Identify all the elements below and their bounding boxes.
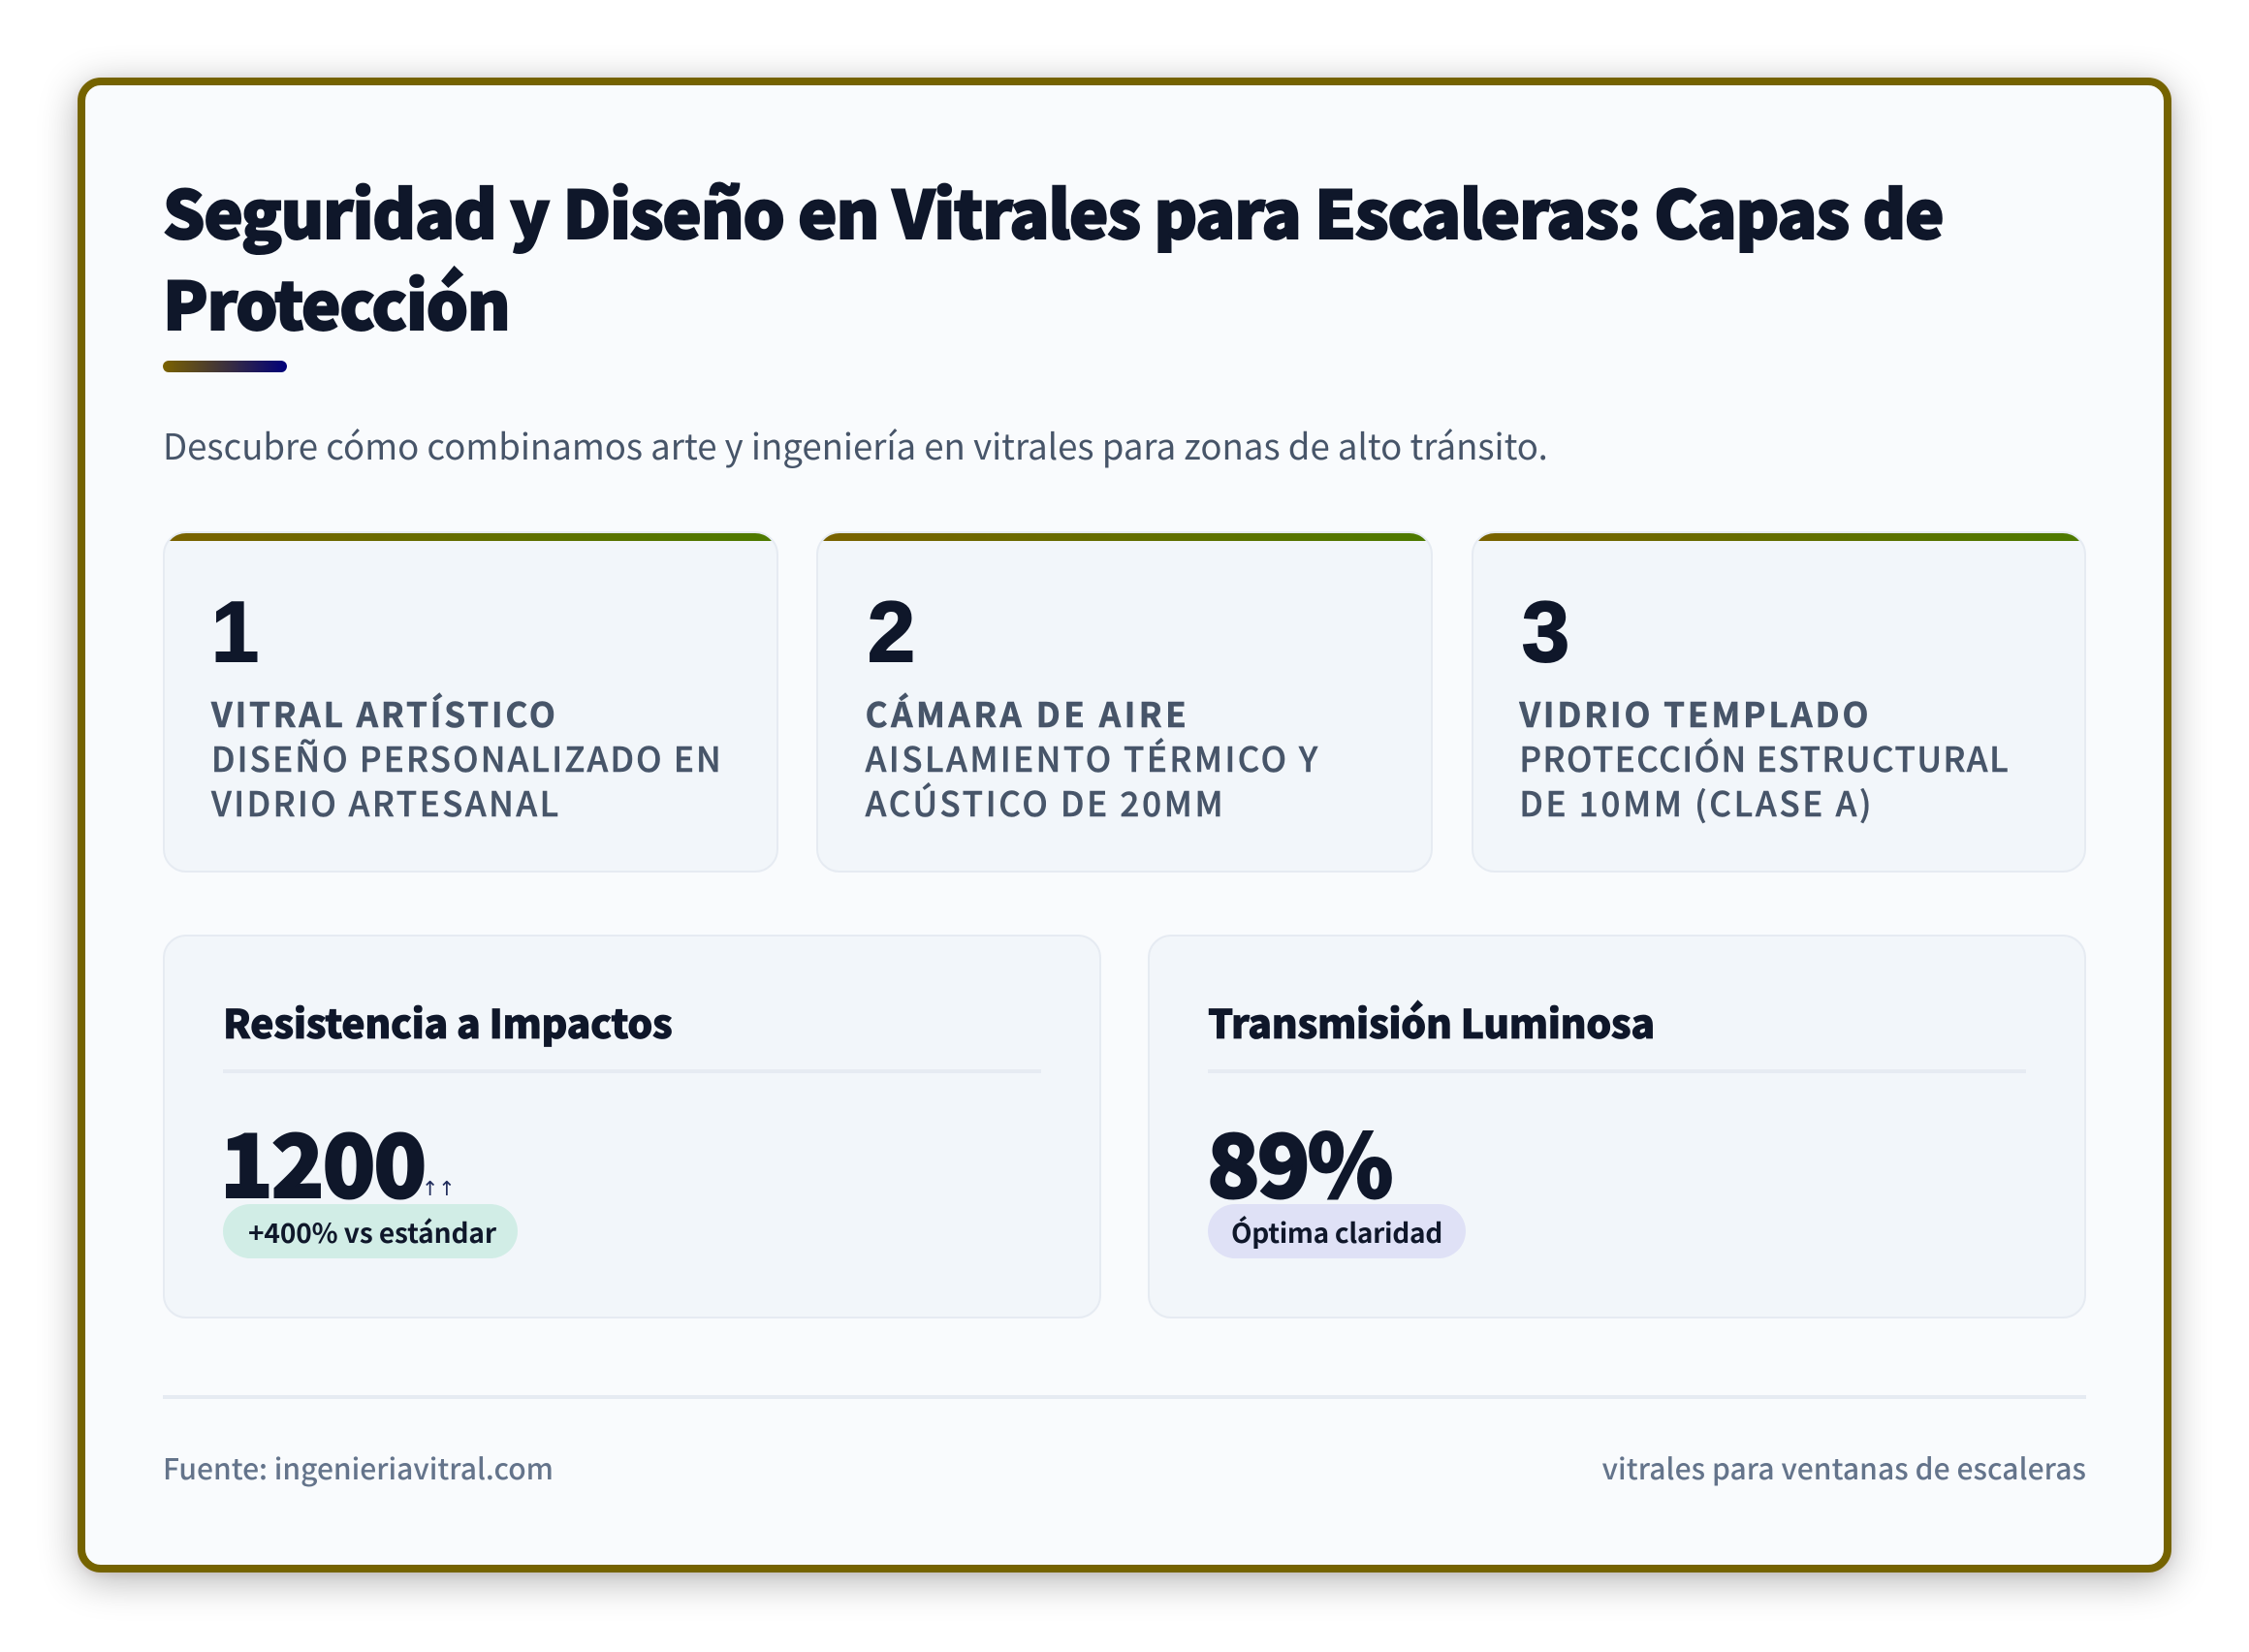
badge +400% — [223, 1204, 518, 1258]
title accent underline — [163, 361, 287, 372]
title — [163, 162, 1944, 349]
panel: impact resistance — [163, 935, 1101, 1318]
panel: layer 3 — [1472, 531, 2086, 873]
badge text +400%: +400% vs estándar — [248, 1213, 496, 1252]
label layer 1: VITRAL ARTÍSTICO — [211, 688, 558, 738]
footer source: Fuente: ingenieriavitral.com — [163, 1446, 554, 1488]
number 1: 1 — [211, 584, 259, 680]
title: Protección — [163, 253, 510, 349]
panel: light transmission — [1148, 935, 2086, 1318]
heading impact resistance: Resistencia a Impactos — [223, 992, 672, 1050]
label layer 3: PROTECCIÓN ESTRUCTURAL — [1519, 733, 2010, 782]
label layer 3 — [1518, 688, 2010, 827]
title: Seguridad y Diseño en Vitrales para Escaleras: Capas de — [163, 162, 1944, 258]
label layer 3: VIDRIO TEMPLADO — [1519, 688, 1871, 738]
footer keyword: vitrales para ventanas de escaleras — [1602, 1446, 2086, 1488]
badge optimal — [1208, 1204, 1466, 1258]
label layer 2: CÁMARA DE AIRE — [866, 688, 1189, 738]
panel: layer 2 — [816, 531, 1433, 873]
heading light transmission: Transmisión Luminosa — [1208, 992, 1655, 1050]
icon: up arrows: ↑↑ — [422, 1177, 456, 1200]
metric 1200: 1200 — [220, 1096, 425, 1223]
number 2: 2 — [868, 584, 915, 680]
metric 89%: 89% — [1207, 1096, 1390, 1223]
label layer 2 — [865, 688, 1320, 827]
subtitle: Descubre cómo combinamos arte y ingeniería en vitrales para zonas de alto tránsito. — [163, 419, 1548, 470]
label layer 1: DISEÑO PERSONALIZADO EN — [211, 733, 723, 782]
label layer 1 — [210, 688, 723, 827]
label layer 1: VIDRIO ARTESANAL — [211, 778, 561, 827]
label layer 2: ACÚSTICO DE 20MM — [866, 778, 1225, 827]
panel: layer 1 — [163, 531, 778, 873]
number 3: 3 — [1522, 584, 1569, 680]
badge text optimal: Óptima claridad — [1231, 1213, 1442, 1252]
label layer 3: DE 10MM (CLASE A) — [1519, 778, 1874, 827]
label layer 2: AISLAMIENTO TÉRMICO Y — [866, 733, 1320, 782]
